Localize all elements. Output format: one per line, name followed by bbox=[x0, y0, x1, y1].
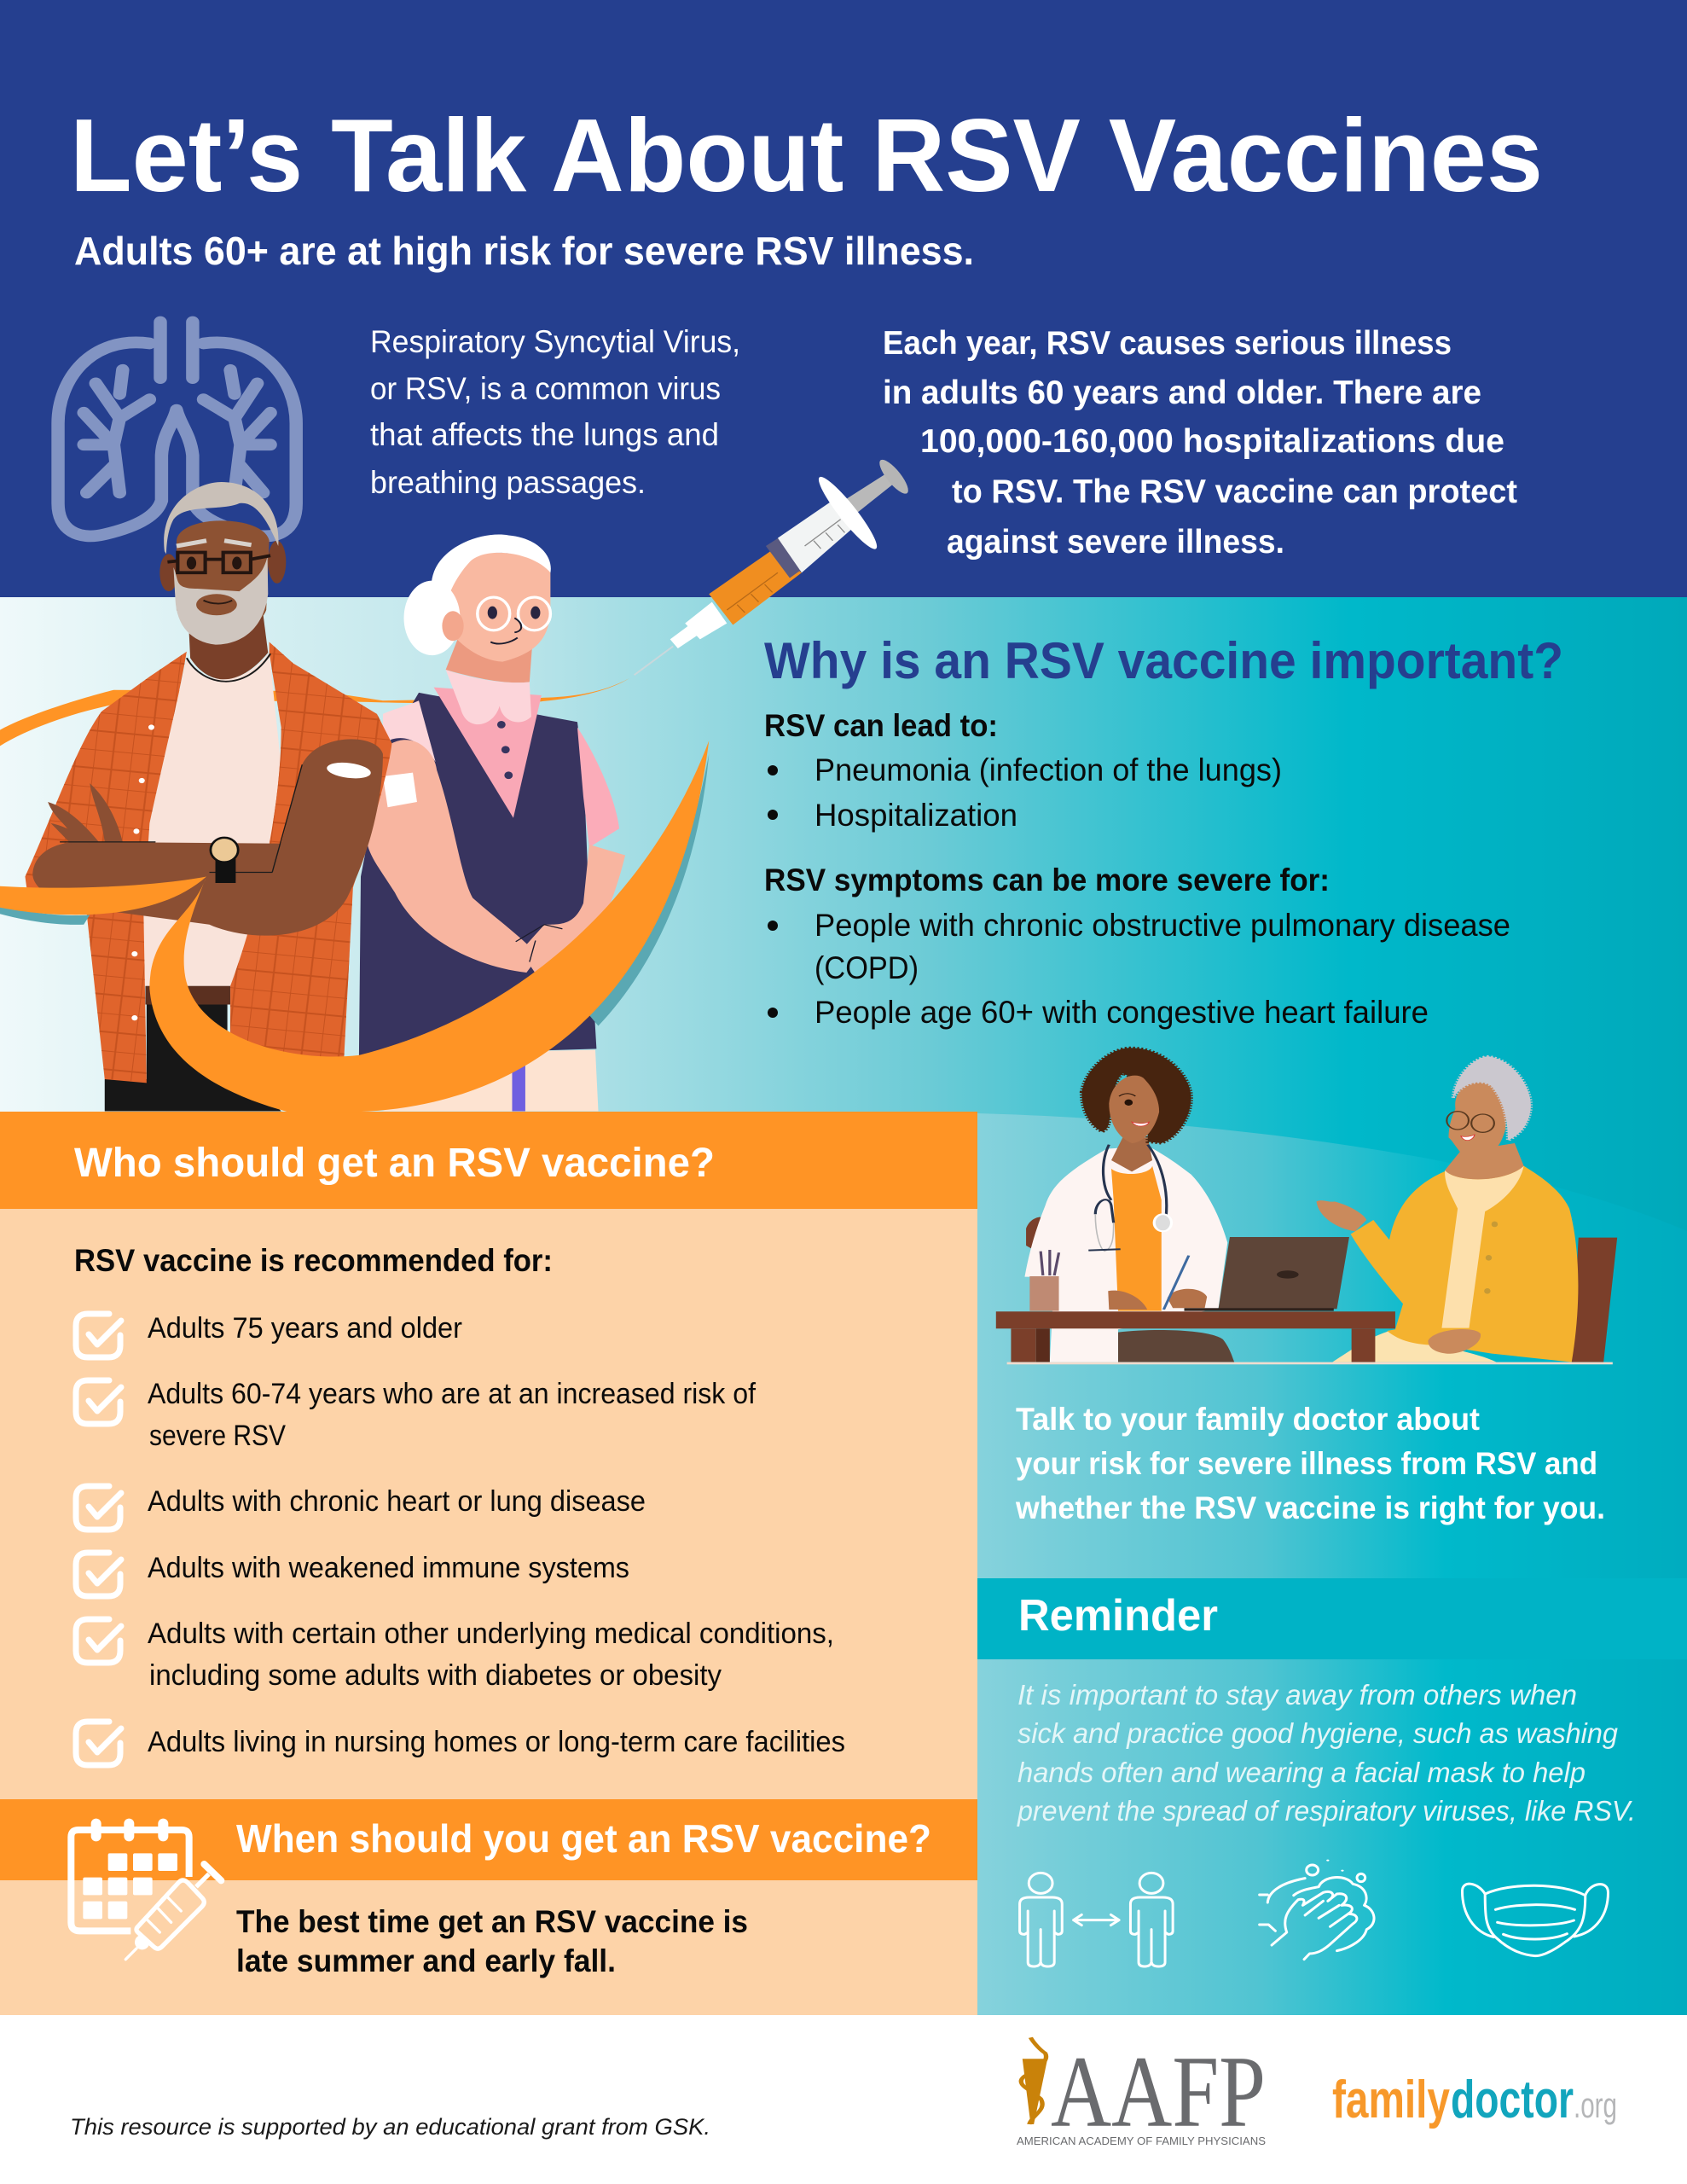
header background bbox=[0, 0, 1687, 597]
icon: calendar and syringe bbox=[71, 1819, 221, 1960]
text block: RSV definition: that affects the lungs and bbox=[370, 417, 719, 452]
text block: RSV can lead to: Pneumonia (infection of the lungs) bbox=[815, 752, 1282, 787]
list item: 75 and older bbox=[76, 1312, 462, 1357]
text block: symptoms more severe: (COPD) bbox=[815, 950, 919, 985]
list item: 75 and older: Adults 75 years and older bbox=[148, 1312, 462, 1345]
heading: why is an RSV vaccine important: Why is an RSV vaccine important? bbox=[764, 632, 1563, 689]
text block: RSV definition: Respiratory Syncytial Virus, bbox=[370, 324, 740, 359]
list item: nursing homes bbox=[76, 1722, 845, 1765]
text block: reminder copy: sick and practice good hygiene, such as washing bbox=[1017, 1717, 1619, 1749]
text block: yearly burden: Each year, RSV causes serious illness bbox=[883, 325, 1452, 362]
illustration: ribbon behind people bbox=[0, 678, 629, 746]
list item: 60-74: Adults 60-74 years who are at an increased risk of bbox=[148, 1378, 757, 1410]
footer note: This resource is supported by an educational grant from GSK. bbox=[70, 2114, 710, 2140]
illustration: front orange ribbon bbox=[0, 741, 709, 1112]
list item: heart or lung disease: Adults with chronic heart or lung disease bbox=[148, 1485, 646, 1518]
text block: talk to your doctor: Talk to your family doctor about bbox=[1016, 1402, 1480, 1437]
text block: talk to your doctor: whether the RSV vaccine is right for you. bbox=[1015, 1490, 1605, 1525]
icon: physical distancing bbox=[1020, 1873, 1173, 1966]
illustration: older man bbox=[25, 482, 391, 1111]
illustration: doctor and patient bbox=[996, 1048, 1617, 1364]
text block: talk to your doctor: your risk for severe illness from RSV and bbox=[1016, 1446, 1597, 1481]
logo: familydoctor.org: doctor bbox=[1451, 2071, 1574, 2129]
text block: symptoms more severe: People age 60+ with congestive heart failure bbox=[815, 995, 1429, 1030]
text block: yearly burden bbox=[883, 325, 1517, 561]
text block: yearly burden: to RSV. The RSV vaccine can protect bbox=[952, 473, 1517, 510]
list item: heart or lung disease bbox=[76, 1485, 646, 1530]
text block: symptoms more severe: RSV symptoms can be more severe for: bbox=[764, 863, 1330, 897]
text block: reminder copy: prevent the spread of respiratory viruses, like RSV. bbox=[1017, 1795, 1636, 1827]
text block: talk to your doctor bbox=[1015, 1402, 1605, 1525]
text block: RSV definition bbox=[370, 324, 740, 500]
illustration: older woman bbox=[359, 535, 625, 1111]
text block: yearly burden: 100,000-160,000 hospitalizations due bbox=[920, 423, 1504, 460]
list item: weakened immune systems: Adults with weakened immune systems bbox=[148, 1552, 629, 1584]
icon: lungs bbox=[58, 322, 296, 536]
list item: 60-74 bbox=[76, 1378, 757, 1452]
icon: hand washing bbox=[1260, 1860, 1374, 1960]
text block: RSV can lead to bbox=[764, 708, 1282, 833]
list item: weakened immune systems bbox=[76, 1552, 629, 1596]
text block: best time: late summer and early fall. bbox=[236, 1943, 616, 1978]
text block: best time bbox=[236, 1904, 748, 1978]
list item: underlying conditions: including some adults with diabetes or obesity bbox=[149, 1659, 722, 1692]
text block: symptoms more severe: People with chronic obstructive pulmonary disease bbox=[815, 908, 1510, 943]
text block: RSV definition: breathing passages. bbox=[370, 465, 646, 500]
text block: yearly burden: against severe illness. bbox=[947, 524, 1284, 561]
heading: reminder: Reminder bbox=[1018, 1591, 1218, 1641]
heading: when should you get a vaccine: When should you get an RSV vaccine? bbox=[236, 1816, 931, 1861]
panel: talk to doctor and reminder bbox=[977, 1113, 1687, 2015]
text block: RSV can lead to: RSV can lead to: bbox=[764, 708, 998, 743]
text block: reminder copy: hands often and wearing a facial mask to help bbox=[1017, 1757, 1586, 1788]
illustration: syringe bbox=[635, 456, 913, 675]
subtitle: Adults 60+ are at high risk for severe RSV illness. bbox=[74, 229, 974, 273]
heading: who should get a vaccine: Who should get an RSV vaccine? bbox=[74, 1141, 715, 1186]
list item: nursing homes: Adults living in nursing homes or long-term care facilities bbox=[148, 1726, 845, 1758]
logo: familydoctor.org: family bbox=[1332, 2071, 1450, 2129]
logo: AAFP: AAFP bbox=[1051, 2035, 1266, 2148]
logo: AAFP: AMERICAN ACADEMY OF FAMILY PHYSICIANS bbox=[1017, 2135, 1266, 2147]
logo: familydoctor.org bbox=[1332, 2071, 1617, 2129]
text block: RSV can lead to: Hospitalization bbox=[815, 798, 1017, 833]
text block: reminder copy: It is important to stay away from others when bbox=[1017, 1679, 1577, 1711]
list item: underlying conditions: Adults with certain other underlying medical conditions, bbox=[148, 1618, 834, 1650]
logo: familydoctor.org: .org bbox=[1574, 2085, 1617, 2125]
title: Let’s Talk About RSV Vaccines bbox=[70, 97, 1543, 213]
text block: best time: The best time get an RSV vaccine is bbox=[236, 1904, 748, 1939]
text block: reminder copy bbox=[1017, 1679, 1636, 1827]
icon: face mask bbox=[1462, 1884, 1608, 1956]
text block: RSV definition: or RSV, is a common virus bbox=[370, 371, 721, 406]
list item: 60-74: severe RSV bbox=[149, 1420, 286, 1452]
panel: who should get a vaccine bbox=[0, 1112, 977, 2015]
list item: underlying conditions bbox=[76, 1618, 834, 1692]
text block: yearly burden: in adults 60 years and older. There are bbox=[883, 375, 1481, 411]
subheading: recommended for: RSV vaccine is recommended for: bbox=[74, 1243, 553, 1278]
checklist bbox=[76, 1312, 845, 1765]
text block: symptoms more severe bbox=[764, 863, 1510, 1030]
gradient band: why section background bbox=[0, 597, 1687, 1246]
